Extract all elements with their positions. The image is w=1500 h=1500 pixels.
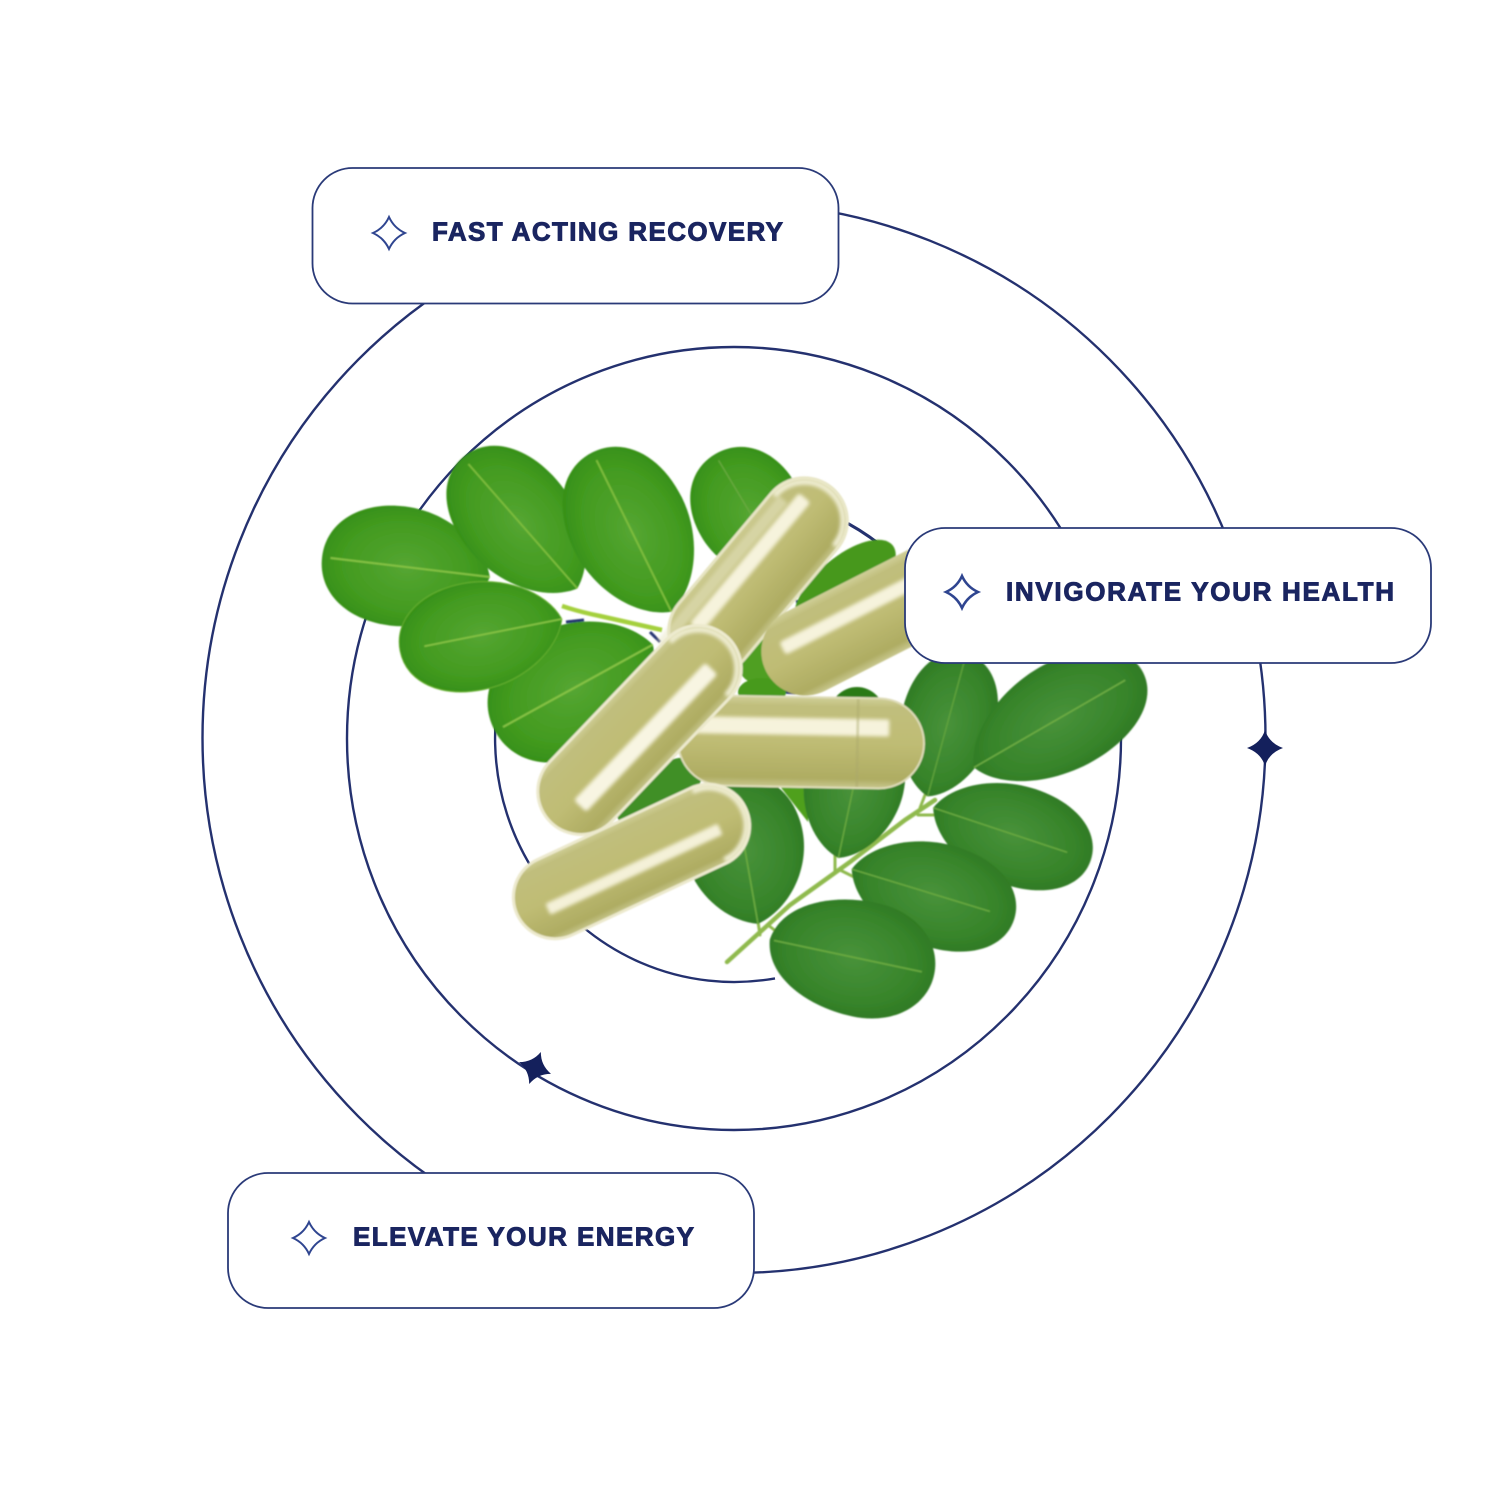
capsule: top diagonal bbox=[651, 460, 865, 692]
leaf: lower right 2 bbox=[837, 819, 1029, 969]
leaf: top right behind capsule bbox=[669, 426, 835, 606]
star marker on outer ring bbox=[1247, 730, 1283, 766]
leaf: lower right 1 bbox=[917, 760, 1107, 908]
leaf: lower left under capsule bbox=[673, 766, 817, 934]
leaf: right behind capsules bbox=[780, 524, 910, 646]
label: invigorate your health: INVIGORATE YOUR HEALTH bbox=[1006, 576, 1394, 606]
leaf: bright sliver bbox=[775, 780, 808, 822]
capsule: horizontal bbox=[677, 695, 925, 789]
label: elevate your energy: ELEVATE YOUR ENERGY bbox=[353, 1222, 694, 1252]
icon: sparkle bbox=[293, 1222, 325, 1254]
icon: sparkle bbox=[373, 217, 405, 249]
leaf: lower centre under capsule bbox=[789, 710, 917, 868]
lower stem bbox=[727, 795, 935, 962]
icon: sparkle bbox=[946, 576, 978, 608]
card: fast acting recovery bbox=[312, 168, 838, 304]
star marker on middle ring bbox=[513, 1046, 557, 1090]
moringa leaves and capsules bbox=[315, 421, 1169, 1031]
concentric rings bbox=[202, 203, 1266, 1273]
label: fast acting recovery: FAST ACTING RECOVERY bbox=[432, 216, 783, 246]
small navy fragments visible between leaves bbox=[566, 600, 800, 693]
card: invigorate your health bbox=[905, 528, 1431, 663]
upper stem bbox=[562, 606, 662, 630]
leaf: lower left large bbox=[464, 588, 684, 788]
leaf: bottom bbox=[758, 883, 946, 1031]
capsule: right diagonal bbox=[746, 523, 1000, 711]
card: elevate your energy bbox=[228, 1173, 754, 1308]
leaf: far left bbox=[315, 497, 497, 637]
leaf: top middle bbox=[539, 426, 725, 638]
leaf: centre patch lower bbox=[738, 678, 786, 706]
leaf: right vertical bbox=[882, 641, 1012, 809]
leaf: far right bbox=[947, 624, 1169, 814]
leaf: dark patch behind horizontal capsule bbox=[829, 687, 885, 745]
leaf: green patch behind lower capsules bbox=[605, 744, 715, 840]
capsule: bottom diagonal bbox=[500, 771, 763, 952]
capsule: front diagonal bbox=[520, 608, 759, 852]
leaf: centre patch upper bbox=[737, 638, 793, 686]
leaf: front left bbox=[390, 566, 572, 704]
leaf: top left bbox=[421, 421, 619, 625]
